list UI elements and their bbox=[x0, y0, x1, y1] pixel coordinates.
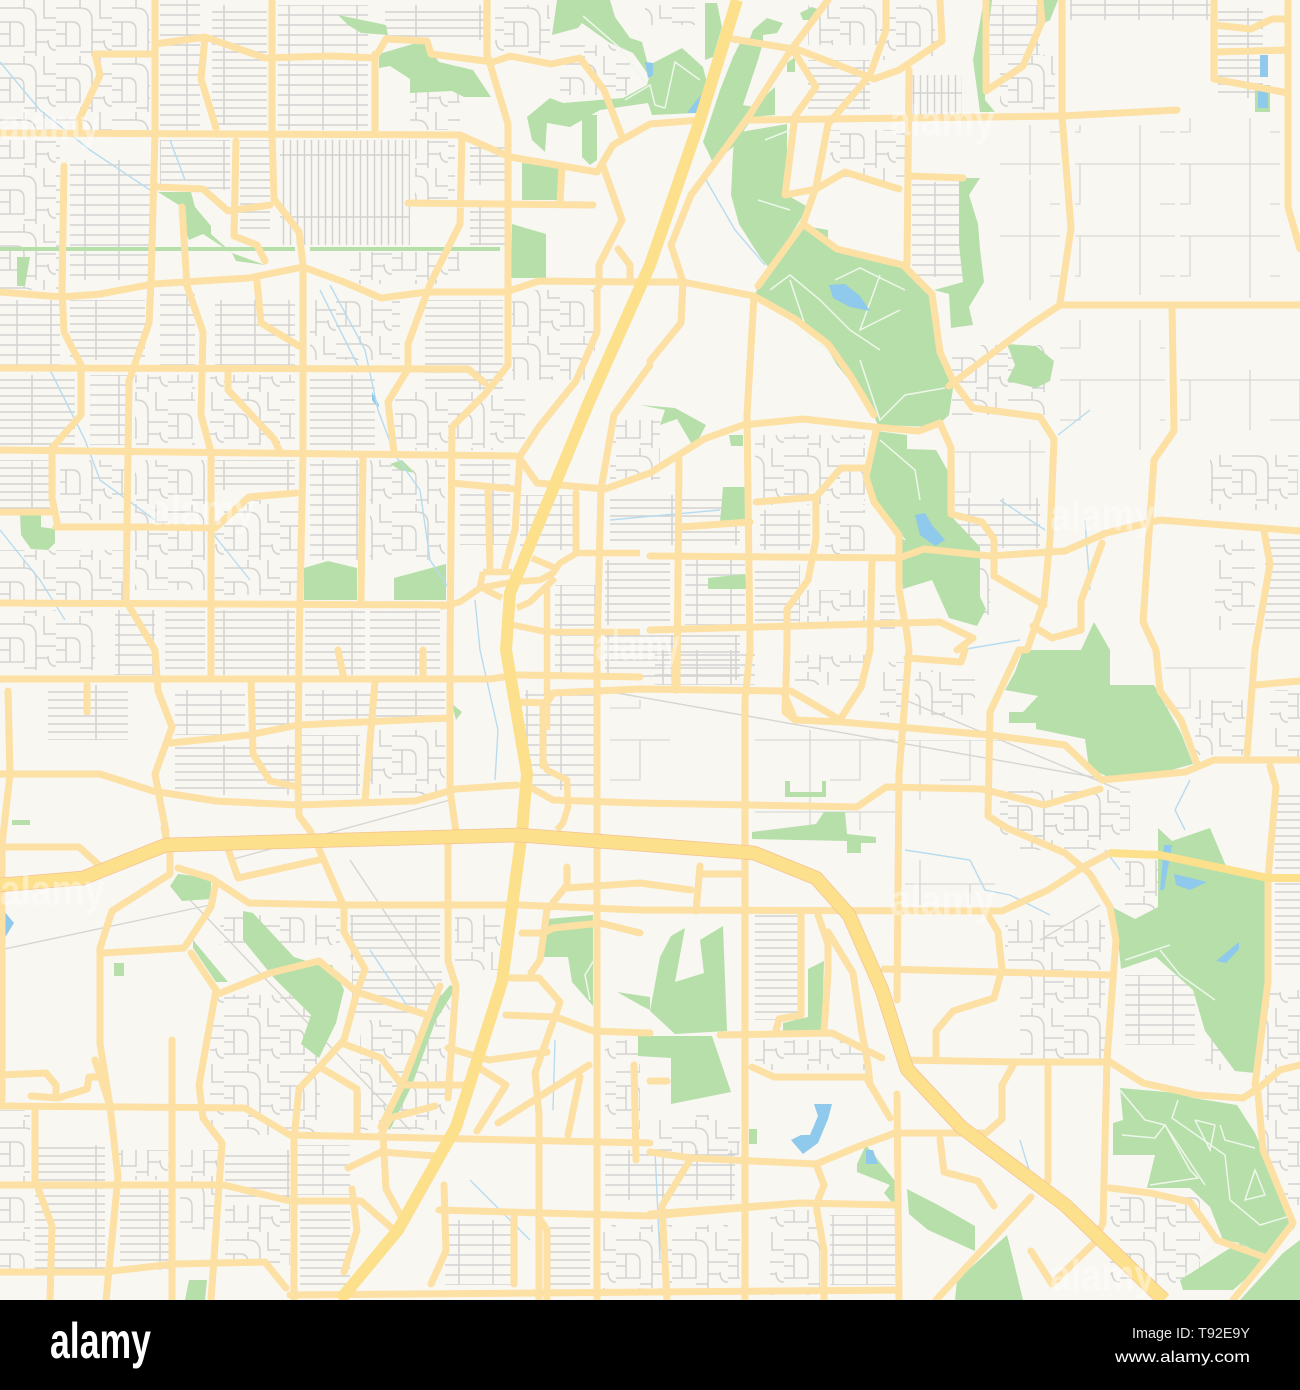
alamy watermarks: alamy bbox=[595, 621, 680, 670]
water bodies and lakes bbox=[3, 55, 1268, 1164]
alamy watermarks: alamy bbox=[0, 866, 105, 915]
alamy watermarks: alamy bbox=[890, 876, 995, 925]
alamy watermarks: alamy bbox=[150, 486, 255, 535]
north-south freeway bbox=[340, 0, 737, 1300]
alamy watermarks: alamy bbox=[1050, 1251, 1155, 1300]
alamy watermarks bbox=[0, 96, 1155, 1300]
website url: www.alamy.com bbox=[1114, 1349, 1250, 1366]
east-west freeway bbox=[0, 835, 1300, 1300]
streams bbox=[0, 62, 1190, 1260]
alamy watermarks: alamy bbox=[0, 101, 100, 150]
interchange ramps bbox=[440, 553, 640, 830]
image id: Image ID: T92E9Y bbox=[1132, 1325, 1250, 1342]
roads: west side and south arterials bbox=[0, 650, 667, 1300]
paths inside parks bbox=[583, 16, 1290, 1275]
alamy watermarks: alamy bbox=[1050, 491, 1155, 540]
alamy logo: alamy bbox=[50, 1313, 151, 1369]
footer bar bbox=[0, 1300, 1300, 1390]
alamy watermarks: alamy bbox=[890, 96, 995, 145]
